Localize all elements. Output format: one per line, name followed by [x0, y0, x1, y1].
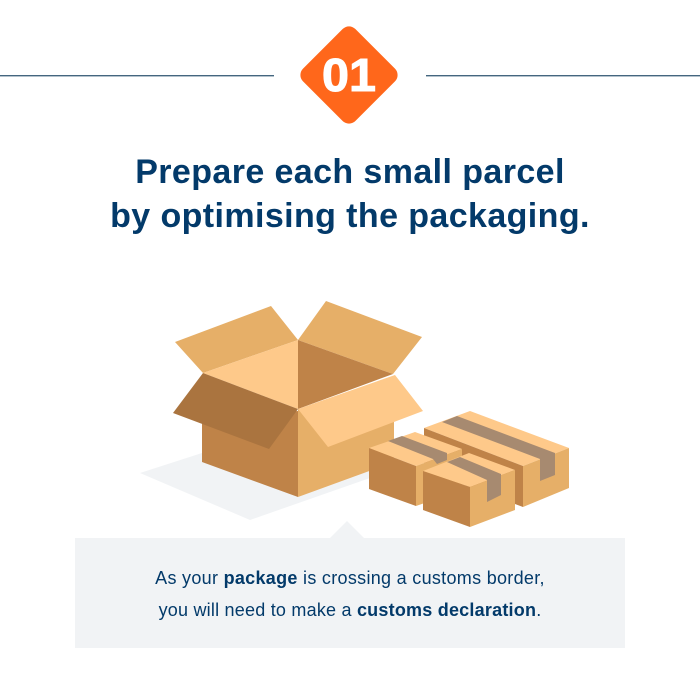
caption box with notch: [75, 521, 625, 648]
badge: orange diamond: 01: [322, 49, 376, 101]
rule right: [426, 75, 700, 76]
title: by optimising the packaging.: [110, 197, 590, 235]
ground shadow: [140, 453, 370, 520]
caption text: As your package is crossing a customs border,: [155, 568, 545, 588]
caption text: [155, 568, 545, 620]
caption text: you will need to make a customs declaration.: [159, 600, 541, 620]
badge: orange diamond: [297, 23, 401, 127]
rule left: [0, 75, 274, 76]
title: [110, 153, 590, 235]
title: Prepare each small parcel: [135, 153, 565, 191]
large open box: [173, 301, 423, 497]
small box front: [423, 453, 515, 527]
small box left: [369, 432, 462, 506]
long flat box: [424, 411, 569, 507]
